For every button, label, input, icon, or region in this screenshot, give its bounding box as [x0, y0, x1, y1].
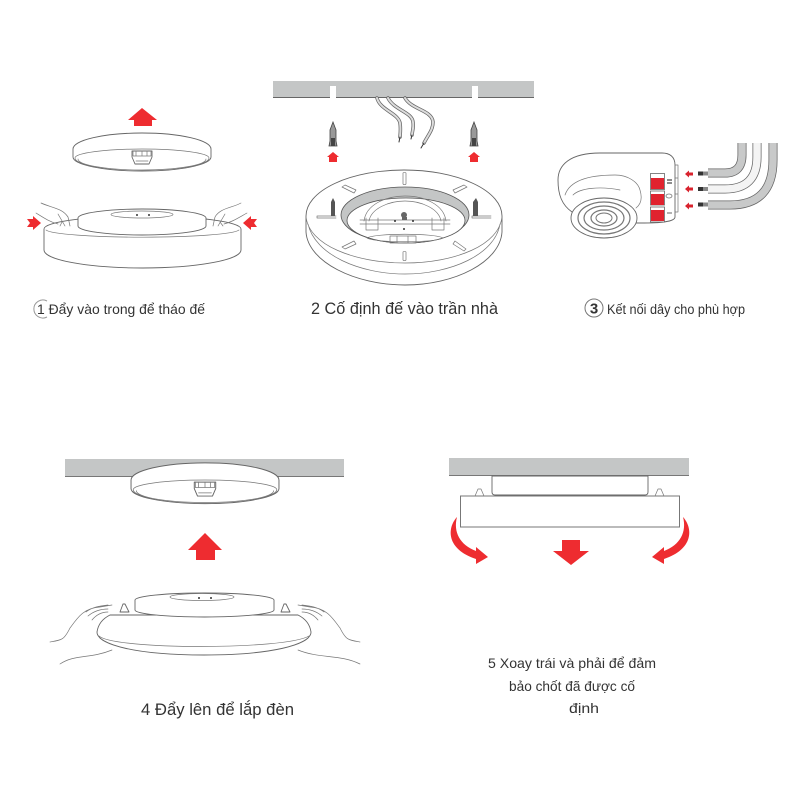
icon: left hand	[36, 203, 70, 226]
icon: mounting base	[306, 170, 502, 285]
arrow: push right	[27, 216, 41, 230]
icon: right hand	[298, 605, 360, 664]
icon: detached base ring	[73, 133, 211, 171]
arrow: up right	[468, 152, 480, 162]
arrow: up	[128, 108, 157, 126]
icon: concentric lens	[571, 198, 637, 238]
arrow: up	[188, 533, 222, 560]
icon: terminal block	[558, 153, 678, 238]
label: step 3: 3	[590, 300, 598, 318]
icon: cables	[698, 143, 773, 205]
label: step 3	[585, 299, 745, 318]
ceiling	[65, 459, 344, 477]
icon: lamp side view	[460, 489, 680, 527]
icon: mounted base ring	[131, 463, 279, 504]
label: step 5: định	[569, 700, 599, 716]
icon: lamp held by hands	[50, 593, 360, 664]
ceiling with notches	[273, 81, 534, 99]
arrow: push left	[243, 216, 257, 230]
icon: wires	[377, 98, 433, 148]
panel: step 4 push up to install	[50, 459, 360, 719]
icon: base side view	[492, 476, 648, 495]
arrow: curved right	[652, 517, 689, 564]
label: step 5: bảo chốt đã được cố	[509, 678, 635, 694]
icon: wall anchor left	[329, 122, 337, 146]
arrows: into terminals	[685, 170, 693, 210]
label: step 4: 4 Đẩy lên để lắp đèn	[141, 700, 294, 719]
panel: step 1 remove base	[27, 108, 257, 318]
panel: step 2 fix base to ceiling	[273, 81, 534, 318]
label: step 5: 5 Xoay trái và phải để đảm	[488, 655, 656, 671]
arrow: curved left	[451, 517, 488, 564]
arrow: down	[553, 540, 589, 565]
arrow: up left	[327, 152, 339, 162]
label: step 5	[488, 655, 656, 716]
icon: wall anchor right	[470, 122, 478, 146]
ceiling	[449, 458, 689, 476]
panel: step 3 connect wires	[558, 143, 773, 318]
icon: lamp with hands pressing	[36, 203, 247, 268]
label: step 3: Kết nối dây cho phù hợp	[607, 302, 745, 317]
label: step 2: 2 Cố định đế vào trần nhà	[311, 299, 499, 318]
icon: red terminals	[650, 174, 664, 222]
label: step 1: 1 Đẩy vào trong để tháo đế	[37, 301, 205, 317]
panel: step 5 rotate to lock	[449, 458, 689, 716]
icon: left hand	[50, 605, 112, 664]
icon: right hand	[213, 203, 247, 226]
